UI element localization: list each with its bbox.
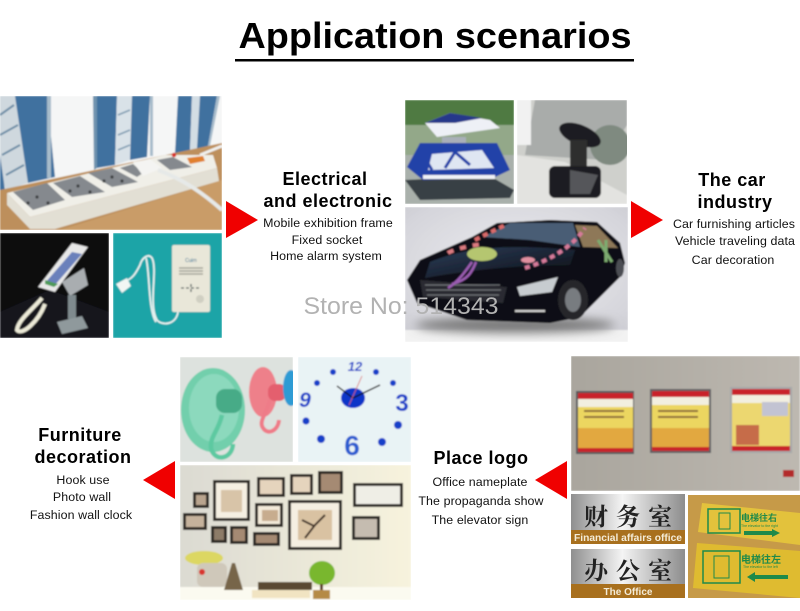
photo: wall clock: 3 xyxy=(395,390,409,417)
photo: wall clock: 12 xyxy=(348,359,363,374)
photo: decorated car xyxy=(405,207,628,342)
text: car items: Car decoration xyxy=(692,253,774,267)
heading: place logo: Place logo xyxy=(433,448,529,468)
text: place items xyxy=(418,475,544,527)
panel: car industry xyxy=(405,100,795,342)
text: place items: The propaganda show xyxy=(418,494,544,508)
text: furniture items xyxy=(30,473,133,522)
text: electrical items: Fixed socket xyxy=(292,233,363,247)
text: electrical items: Mobile exhibition frame xyxy=(263,216,393,230)
watermark: Store No: 514343 xyxy=(304,293,498,320)
photo: elevator signs: 电梯往右 xyxy=(741,512,777,523)
text: car items xyxy=(673,217,795,267)
heading: electrical and electronic: Electrical xyxy=(282,169,368,189)
photo: suction hooks xyxy=(180,357,299,462)
arrow: left xyxy=(143,461,175,499)
photo: elevator signs: The elevator to the right xyxy=(741,524,778,528)
photo: wall clock: 6 xyxy=(344,430,360,461)
photo: phone security stand xyxy=(0,233,109,338)
sign: financial affairs office: 财务室 xyxy=(584,497,680,532)
text: furniture items: Fashion wall clock xyxy=(30,508,133,522)
text: car items: Vehicle traveling data xyxy=(675,234,795,248)
photo: dash camera xyxy=(517,100,630,204)
photo: crystal perfume xyxy=(405,100,514,204)
sign: financial affairs office xyxy=(571,494,685,544)
photo: elevator signs: 电梯往左 xyxy=(741,553,781,566)
heading: furniture decoration: decoration xyxy=(34,447,132,467)
photo: home alarm: Cuim xyxy=(185,258,197,264)
heading: the car industry xyxy=(697,170,773,212)
photo: wall posters xyxy=(571,356,800,491)
photo: power strip xyxy=(0,96,222,230)
photo: elevator signs xyxy=(688,495,800,598)
heading: electrical and electronic xyxy=(263,169,393,211)
panel: place logo xyxy=(418,356,800,598)
text: car items: Car furnishing articles xyxy=(673,217,795,231)
text: place items: Office nameplate xyxy=(432,475,528,489)
sign: the office: 办公室 xyxy=(584,551,680,586)
photo: photo wall xyxy=(180,465,411,600)
sign: the office: The Office xyxy=(604,587,653,598)
heading: the car industry: industry xyxy=(697,192,773,212)
arrow: right xyxy=(631,201,663,238)
arrow: right xyxy=(226,201,258,238)
photo: home alarm xyxy=(113,233,222,338)
text: electrical items: Home alarm system xyxy=(270,249,382,263)
text: furniture items: Hook use xyxy=(56,473,110,487)
panel: furniture decoration xyxy=(30,357,411,600)
text: electrical items xyxy=(263,216,393,263)
heading: furniture decoration: Furniture xyxy=(38,425,122,445)
sign: financial affairs office: Financial affairs office xyxy=(574,532,682,544)
heading: the car industry: The car xyxy=(698,170,766,190)
text: furniture items: Photo wall xyxy=(53,490,111,504)
panel: electrical and electronic xyxy=(0,96,393,338)
heading: furniture decoration xyxy=(34,425,132,467)
heading: electrical and electronic: and electronic xyxy=(263,191,393,211)
photo: wall clock: 9 xyxy=(299,389,311,412)
photo: wall clock xyxy=(298,357,411,462)
sign: the office xyxy=(571,549,685,598)
photo: elevator signs: The elevator to the left xyxy=(743,565,778,569)
arrow: left xyxy=(535,461,567,499)
title: Application scenarios xyxy=(238,15,632,56)
text: place items: The elevator sign xyxy=(432,513,528,527)
